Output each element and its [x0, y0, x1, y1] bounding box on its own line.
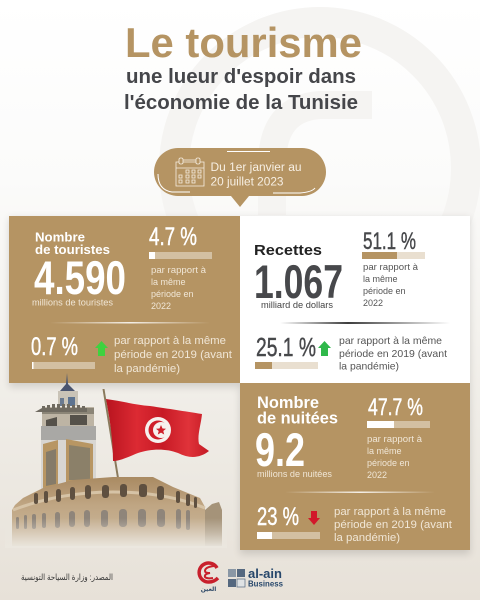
tourists unit: millions de touristes: [32, 298, 114, 308]
stays number: 9.2: [255, 423, 305, 476]
stat: 4.7 percent vs 2022: [149, 223, 212, 311]
stat: 23 percent vs 2019: 23 %: [257, 503, 299, 531]
stat: 23 percent vs 2019: la pandémie): [334, 532, 400, 544]
panel: revenue: [240, 216, 470, 383]
stat: 0.7 percent vs 2019: 0.7 %: [31, 333, 78, 361]
stat: 0.7 percent vs 2019: par rapport à la même: [114, 335, 226, 347]
source note: المصدر: وزارة السياحة التونسية: [21, 572, 113, 582]
tourists heading: [35, 230, 110, 257]
title: Le tourisme: [125, 19, 362, 66]
stat: 51.1 percent vs 2022: par rapport à: [363, 262, 418, 272]
tourists heading: Nombre: [35, 230, 85, 244]
stat: 47.7 percent vs 2022: 2022: [367, 470, 387, 480]
stat: 0.7 percent vs 2019: période en 2019 (avant: [114, 349, 232, 361]
watermark logo: [174, 22, 466, 314]
stays heading: de nuitées: [257, 410, 338, 428]
social icons: [228, 569, 245, 587]
stays heading: [257, 394, 338, 428]
revenue number: 1.067: [254, 255, 343, 308]
stays unit: millions de nuitées: [257, 469, 332, 479]
stat: 25.1 percent vs 2019: période en 2019 (avant: [339, 349, 447, 360]
icon: green up arrow: [318, 341, 331, 356]
stat: 47.7 percent vs 2022: par rapport à: [367, 434, 422, 444]
stat: 23 percent vs 2019: [257, 503, 452, 544]
flag of Tunisia: [106, 399, 209, 461]
stays heading: Nombre: [257, 394, 319, 412]
panel: overnight stays: [240, 383, 470, 550]
stat: 47.7 percent vs 2022: période en: [367, 458, 410, 468]
stat: 51.1 percent vs 2022: période en: [363, 286, 406, 296]
stat: 47.7 percent vs 2022: [367, 394, 430, 480]
stat: 51.1 percent vs 2022: 51.1 %: [363, 228, 416, 255]
date badge: [154, 148, 326, 207]
stat: 4.7 percent vs 2022: période en: [151, 289, 194, 299]
tourists heading: de touristes: [35, 242, 110, 257]
logo: al-ain Business wordmark: [248, 566, 283, 588]
date text: 20 juillet 2023: [210, 176, 284, 188]
stat: 4.7 percent vs 2022: par rapport à: [151, 265, 206, 275]
icon: green up arrow: [95, 341, 108, 356]
stat: 0.7 percent vs 2019: la pandémie): [114, 363, 180, 375]
stat: 4.7 percent vs 2022: 2022: [151, 301, 171, 311]
icon: calendar: [176, 158, 204, 186]
tourists number: 4.590: [34, 251, 126, 304]
amphitheatre: [5, 477, 227, 548]
date text: Du 1er janvier au: [210, 162, 302, 174]
stat: 51.1 percent vs 2022: [362, 228, 425, 308]
revenue unit: milliard de dollars: [261, 300, 334, 310]
logo: al-ain emblem: العين: [201, 586, 216, 593]
stat: 0.7 percent vs 2019: [31, 333, 232, 375]
stat: 47.7 percent vs 2022: la même: [367, 446, 402, 456]
icon: red down arrow: [308, 511, 320, 525]
stat: 4.7 percent vs 2022: la même: [151, 277, 186, 287]
stat: 23 percent vs 2019: période en 2019 (avant: [334, 519, 452, 531]
stat: 47.7 percent vs 2022: 47.7 %: [368, 394, 423, 421]
panel shadows: [9, 218, 470, 554]
stat: 4.7 percent vs 2022: 4.7 %: [149, 223, 197, 251]
stat: 23 percent vs 2019: par rapport à la même: [334, 506, 446, 518]
subtitle: une lueur d'espoir dans: [126, 65, 356, 88]
subtitle: l'économie de la Tunisie: [124, 91, 358, 114]
logo: al-ain Business wordmark: al-ain: [248, 566, 282, 581]
panel: tourists: [9, 216, 240, 383]
revenue heading: Recettes: [254, 242, 322, 259]
stat: 51.1 percent vs 2022: 2022: [363, 298, 383, 308]
stat: 25.1 percent vs 2019: [255, 332, 447, 372]
minaret: [35, 373, 96, 492]
stat: 25.1 percent vs 2019: la pandémie): [339, 362, 399, 372]
date text: [210, 162, 302, 188]
stat: 25.1 percent vs 2019: 25.1 %: [256, 332, 316, 362]
subtitle: [124, 65, 358, 114]
stat: 51.1 percent vs 2022: la même: [363, 274, 398, 284]
flag pole: [102, 389, 119, 478]
illustration: minaret, flag and amphitheatre: [5, 373, 227, 548]
logo: al-ain emblem: [199, 563, 218, 593]
logo: al-ain Business wordmark: Business: [248, 578, 283, 588]
stat: 25.1 percent vs 2019: par rapport à la même: [339, 336, 442, 347]
